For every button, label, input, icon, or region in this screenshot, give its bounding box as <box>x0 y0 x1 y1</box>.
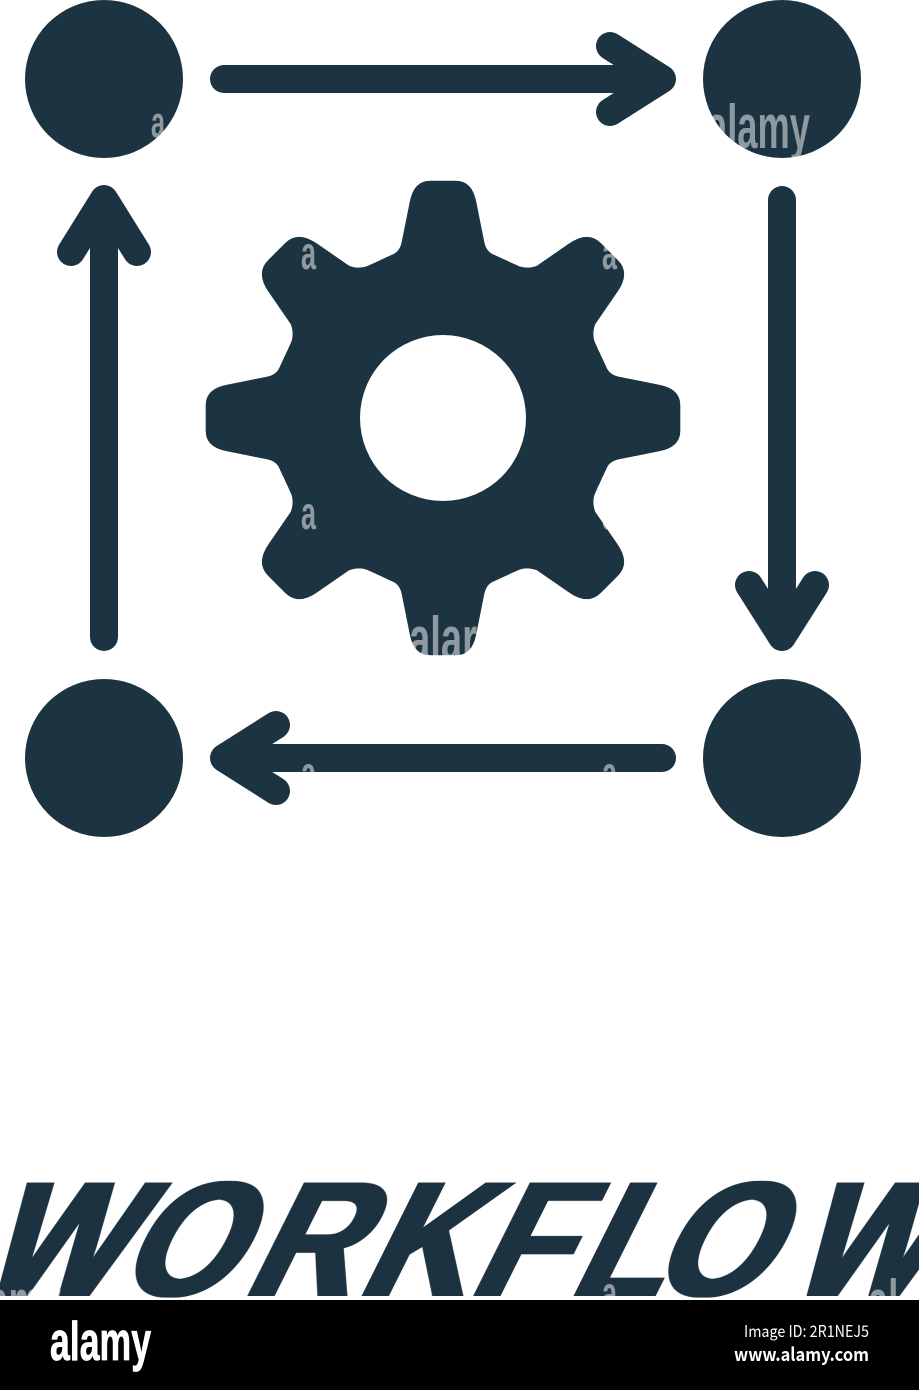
icon: central gear <box>206 181 680 655</box>
watermark fragments: alamy <box>707 93 810 162</box>
watermark fragments: a <box>602 1267 617 1319</box>
arrow: top, pointing right <box>224 46 662 112</box>
node: bottom-right circle <box>703 679 861 837</box>
arrow: right, pointing down <box>749 200 815 637</box>
node: top-right circle <box>703 0 861 158</box>
node: bottom-left circle <box>25 679 183 837</box>
arrow: bottom, pointing left <box>224 725 662 791</box>
arrow: left, pointing up <box>71 199 137 637</box>
watermark fragments: a <box>151 98 165 147</box>
watermark fragments: a <box>301 747 316 799</box>
footer: website: www.alamy.com <box>734 1341 869 1367</box>
footer bar <box>0 1300 919 1390</box>
node: top-left circle <box>25 0 183 158</box>
watermark fragments: a <box>301 227 316 279</box>
watermark fragments: a <box>602 227 617 279</box>
watermark fragments: a <box>602 747 617 799</box>
watermark fragments: alar <box>409 605 477 674</box>
watermark fragments: a <box>301 487 316 539</box>
watermark fragments: a <box>602 487 617 539</box>
footer logo: alamy: alamy <box>50 1310 151 1372</box>
footer: image id: Image ID: 2R1NEJ5 <box>744 1318 869 1342</box>
